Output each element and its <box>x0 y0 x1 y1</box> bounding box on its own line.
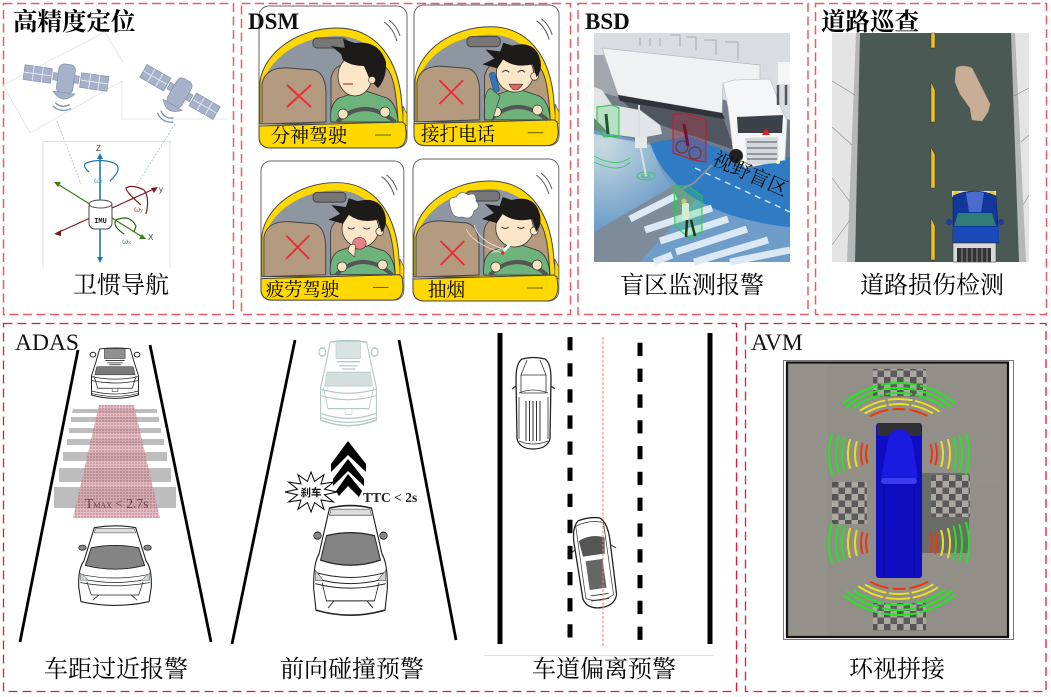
panel: AVM surround view <box>746 324 1046 692</box>
parking sensor arcs: rear <box>776 405 1022 651</box>
chart: IMU axes diagram: X <box>148 233 154 242</box>
chart: IMU axes diagram: IMU <box>94 218 107 226</box>
panel: road patrol <box>816 4 1046 314</box>
label: distracted driving: 分神驾驶 <box>271 125 347 147</box>
card: making phone calls <box>414 5 559 146</box>
heading: DSM: DSM <box>248 9 299 34</box>
illustration: surround view stitching <box>776 347 1022 651</box>
heading: road patrol: 道路巡查 <box>821 8 919 36</box>
panel: DSM driver monitoring <box>242 4 570 314</box>
road edges <box>20 345 211 642</box>
damage patch <box>955 66 990 121</box>
heading: BSD: BSD <box>585 9 630 34</box>
caption: forward collision warning: 前向碰撞预警 <box>280 656 424 683</box>
icon: ghost leading car <box>319 341 378 426</box>
caption: satellite inertial navigation: 卫惯导航 <box>73 272 169 299</box>
parking sensor arcs: front <box>776 347 1022 593</box>
group: lane departure warning <box>484 333 714 683</box>
chart: IMU axes diagram: y <box>159 185 163 194</box>
icon: following car <box>79 526 151 605</box>
warning zone <box>73 405 160 518</box>
group: forward collision warning <box>232 340 456 683</box>
panel: high precision positioning <box>3 4 234 314</box>
caption: blind spot monitoring alert: 盲区监测报警 <box>620 272 764 299</box>
caption: road damage detection: 道路损伤检测 <box>860 272 1004 299</box>
road lane dashes <box>931 33 935 260</box>
panel border <box>4 324 736 692</box>
distance stripes <box>54 409 176 508</box>
panel: BSD blind spot detection <box>578 4 808 314</box>
road edges <box>232 340 456 644</box>
panel border <box>242 4 570 314</box>
icon: car braking <box>314 506 387 615</box>
card: fatigued driving <box>261 161 404 300</box>
icon: left satellite <box>3 32 123 133</box>
panel border <box>578 4 808 314</box>
signal lines <box>57 121 175 186</box>
panel border <box>746 324 1046 692</box>
arrow: closing chevrons <box>331 441 366 497</box>
heading: AVM: AVM <box>751 330 803 356</box>
label: blind zone: 视野盲区 <box>709 148 791 201</box>
icon: car departing lane <box>566 515 624 611</box>
caption: lane departure warning: 车道偏离预警 <box>532 656 676 683</box>
panel: ADAS <box>4 324 736 692</box>
parking sensor arcs: right front <box>812 367 986 541</box>
icon: leading car <box>90 348 140 398</box>
departure reference line <box>602 337 604 647</box>
group: following distance alert <box>20 345 211 683</box>
icon: brake burst: 刹车 <box>300 486 322 499</box>
calibration checkerboards <box>832 369 970 631</box>
icon: right satellite <box>122 59 228 141</box>
card: smoking <box>413 159 559 301</box>
heading: ADAS: ADAS <box>15 330 79 356</box>
illustration: road damage detection <box>832 33 1029 262</box>
parking sensor arcs: left rear <box>812 456 986 630</box>
vehicle: blue bus <box>876 423 922 578</box>
caption: following distance alert: 车距过近报警 <box>44 656 188 683</box>
panel border <box>4 4 234 314</box>
card: distracted driving <box>259 6 407 148</box>
parking sensor arcs: right rear <box>812 456 986 630</box>
label: making phone calls: 接打电话 <box>421 125 496 146</box>
heading: high precision positioning: 高精度定位 <box>13 7 136 36</box>
label: fatigued driving: 疲劳驾驶 <box>266 280 340 300</box>
lane lines <box>500 333 710 644</box>
label: smoking: 抽烟 <box>428 279 465 301</box>
parking sensor arcs: left front <box>812 367 986 541</box>
caption: surround view stitching: 环视拼接 <box>849 656 946 683</box>
label: time to collision: TTC < 2s <box>363 490 417 505</box>
chart: IMU axes diagram <box>43 142 170 268</box>
chart: IMU axes diagram: ωx <box>122 237 131 246</box>
illustration: truck blind spot scene <box>594 33 791 262</box>
baseline rule <box>484 654 714 656</box>
chart: IMU axes diagram: ωz <box>94 176 103 185</box>
chart: IMU axes diagram: Z <box>96 144 101 153</box>
icon: car in lane <box>512 358 555 449</box>
icon: brake burst <box>285 472 337 512</box>
icon: cigarette smoke <box>449 192 510 255</box>
label: headway threshold: TMAX < 2.7s <box>85 496 148 511</box>
chart: IMU axes diagram: ωy <box>134 205 143 214</box>
panel border <box>816 4 1046 314</box>
icon: blue truck <box>946 191 1004 262</box>
